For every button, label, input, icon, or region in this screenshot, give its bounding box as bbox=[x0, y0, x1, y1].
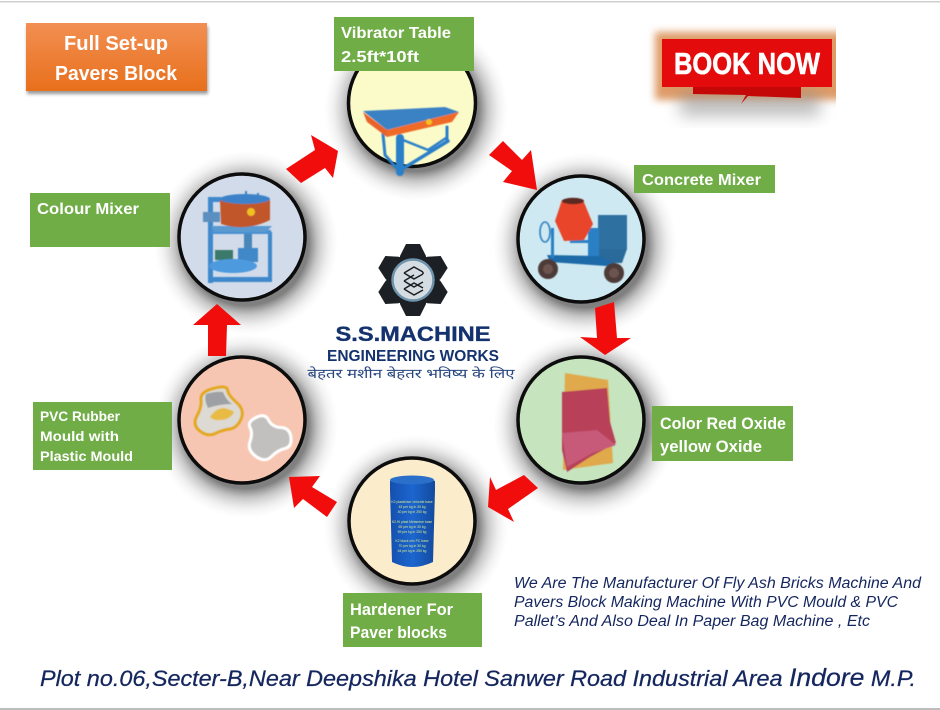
icon: blue chemical drum: 65 per kg in 30 kg bbox=[399, 525, 426, 529]
manufacturer description bbox=[514, 575, 922, 630]
circle: pvc rubber mould bbox=[154, 334, 338, 518]
arrow: hardener to pvc mould bbox=[289, 476, 337, 517]
icon: blue chemical drum: K2 black mix PC base bbox=[395, 539, 429, 543]
label: vibrator table bbox=[334, 17, 474, 71]
icon: blue chemical drum: 64 per kg in 250 kg bbox=[398, 549, 427, 553]
icon: blue chemical drum bbox=[390, 476, 435, 567]
icon: vibrator table machine bbox=[363, 107, 459, 172]
center logo bbox=[308, 244, 516, 381]
icon: blue chemical drum: K2 Hi plast Melamine base bbox=[392, 520, 432, 524]
manufacturer description: Pavers Block Making Machine With PVC Mould & PVC bbox=[514, 594, 899, 611]
icon: pan mixer machine bbox=[203, 191, 272, 283]
manufacturer description: Pallet’s And Also Deal In Paper Bag Machine , Etc bbox=[514, 613, 870, 630]
address line: Plot no.06,Secter-B,Near Deepshika Hotel Sanwer Road Industrial Area Indore M.P. bbox=[40, 664, 916, 692]
label: pvc rubber mould: Mould with bbox=[40, 428, 119, 444]
icon: concrete mixer machine bbox=[538, 198, 627, 283]
circle: hardener drum bbox=[324, 435, 508, 619]
title badge: Full Set-up Pavers Block: Pavers Block bbox=[55, 63, 178, 85]
icon: yellow and white paver moulds bbox=[195, 387, 291, 460]
arrow: pvc mould to colour mixer bbox=[193, 304, 241, 356]
label: vibrator table: 2.5ft*10ft bbox=[341, 49, 420, 66]
icon: blue chemical drum: 40 per kg in 250 kg bbox=[398, 510, 427, 514]
label: concrete mixer bbox=[634, 165, 775, 193]
icon: oxide powder bag bbox=[562, 373, 616, 472]
hindi tagline: बेहतर मशीन बेहतर भविष्य के लिए bbox=[308, 366, 516, 381]
arrow: colour mixer to vibrator table bbox=[286, 135, 338, 183]
title badge: Full Set-up Pavers Block: Full Set-up bbox=[64, 33, 168, 55]
label: colour mixer: Colour Mixer bbox=[37, 201, 139, 218]
label: color red oxide: Color Red Oxide bbox=[660, 414, 786, 433]
label: colour mixer bbox=[30, 193, 170, 247]
icon: blue chemical drum: 59 per kg in 250 kg bbox=[398, 530, 427, 534]
manufacturer description: We Are The Manufacturer Of Fly Ash Bricks Machine And bbox=[514, 575, 922, 592]
label: hardener: Paver blocks bbox=[350, 623, 447, 642]
label: vibrator table: Vibrator Table bbox=[341, 25, 451, 42]
icon: gear with SS mark bbox=[375, 244, 451, 316]
circle: colour mixer bbox=[154, 151, 338, 335]
icon: blue chemical drum: 70 per kg in 30 kg bbox=[399, 544, 426, 548]
circle: vibrator table bbox=[324, 17, 508, 201]
label: color red oxide bbox=[652, 406, 793, 461]
company name: S.S.MACHINE bbox=[336, 323, 490, 346]
circle: red oxide bag bbox=[493, 334, 677, 518]
label: color red oxide: yellow Oxide bbox=[660, 437, 762, 456]
icon: blue chemical drum: 45 per kg in 30 kg bbox=[399, 505, 426, 509]
arrow: concrete mixer to oxide bbox=[580, 302, 631, 355]
label: concrete mixer: Concrete Mixer bbox=[642, 172, 761, 189]
title badge: Full Set-up Pavers Block bbox=[26, 23, 208, 94]
label: pvc rubber mould: PVC Rubber bbox=[40, 408, 121, 424]
book now banner bbox=[655, 32, 855, 116]
label: pvc rubber mould: Plastic Mould bbox=[40, 448, 133, 464]
book now banner: BOOK NOW bbox=[674, 46, 821, 81]
icon: blue chemical drum: K2 plasticiser chloride base bbox=[391, 500, 433, 504]
label: hardener bbox=[343, 593, 482, 647]
label: hardener: Hardener For bbox=[350, 600, 453, 619]
circle: concrete mixer bbox=[493, 153, 677, 337]
arrow: vibrator table to concrete mixer bbox=[489, 141, 537, 190]
arrow: oxide to hardener bbox=[488, 475, 538, 522]
label: pvc rubber mould bbox=[33, 402, 172, 470]
subtitle: ENGINEERING WORKS bbox=[327, 348, 499, 365]
